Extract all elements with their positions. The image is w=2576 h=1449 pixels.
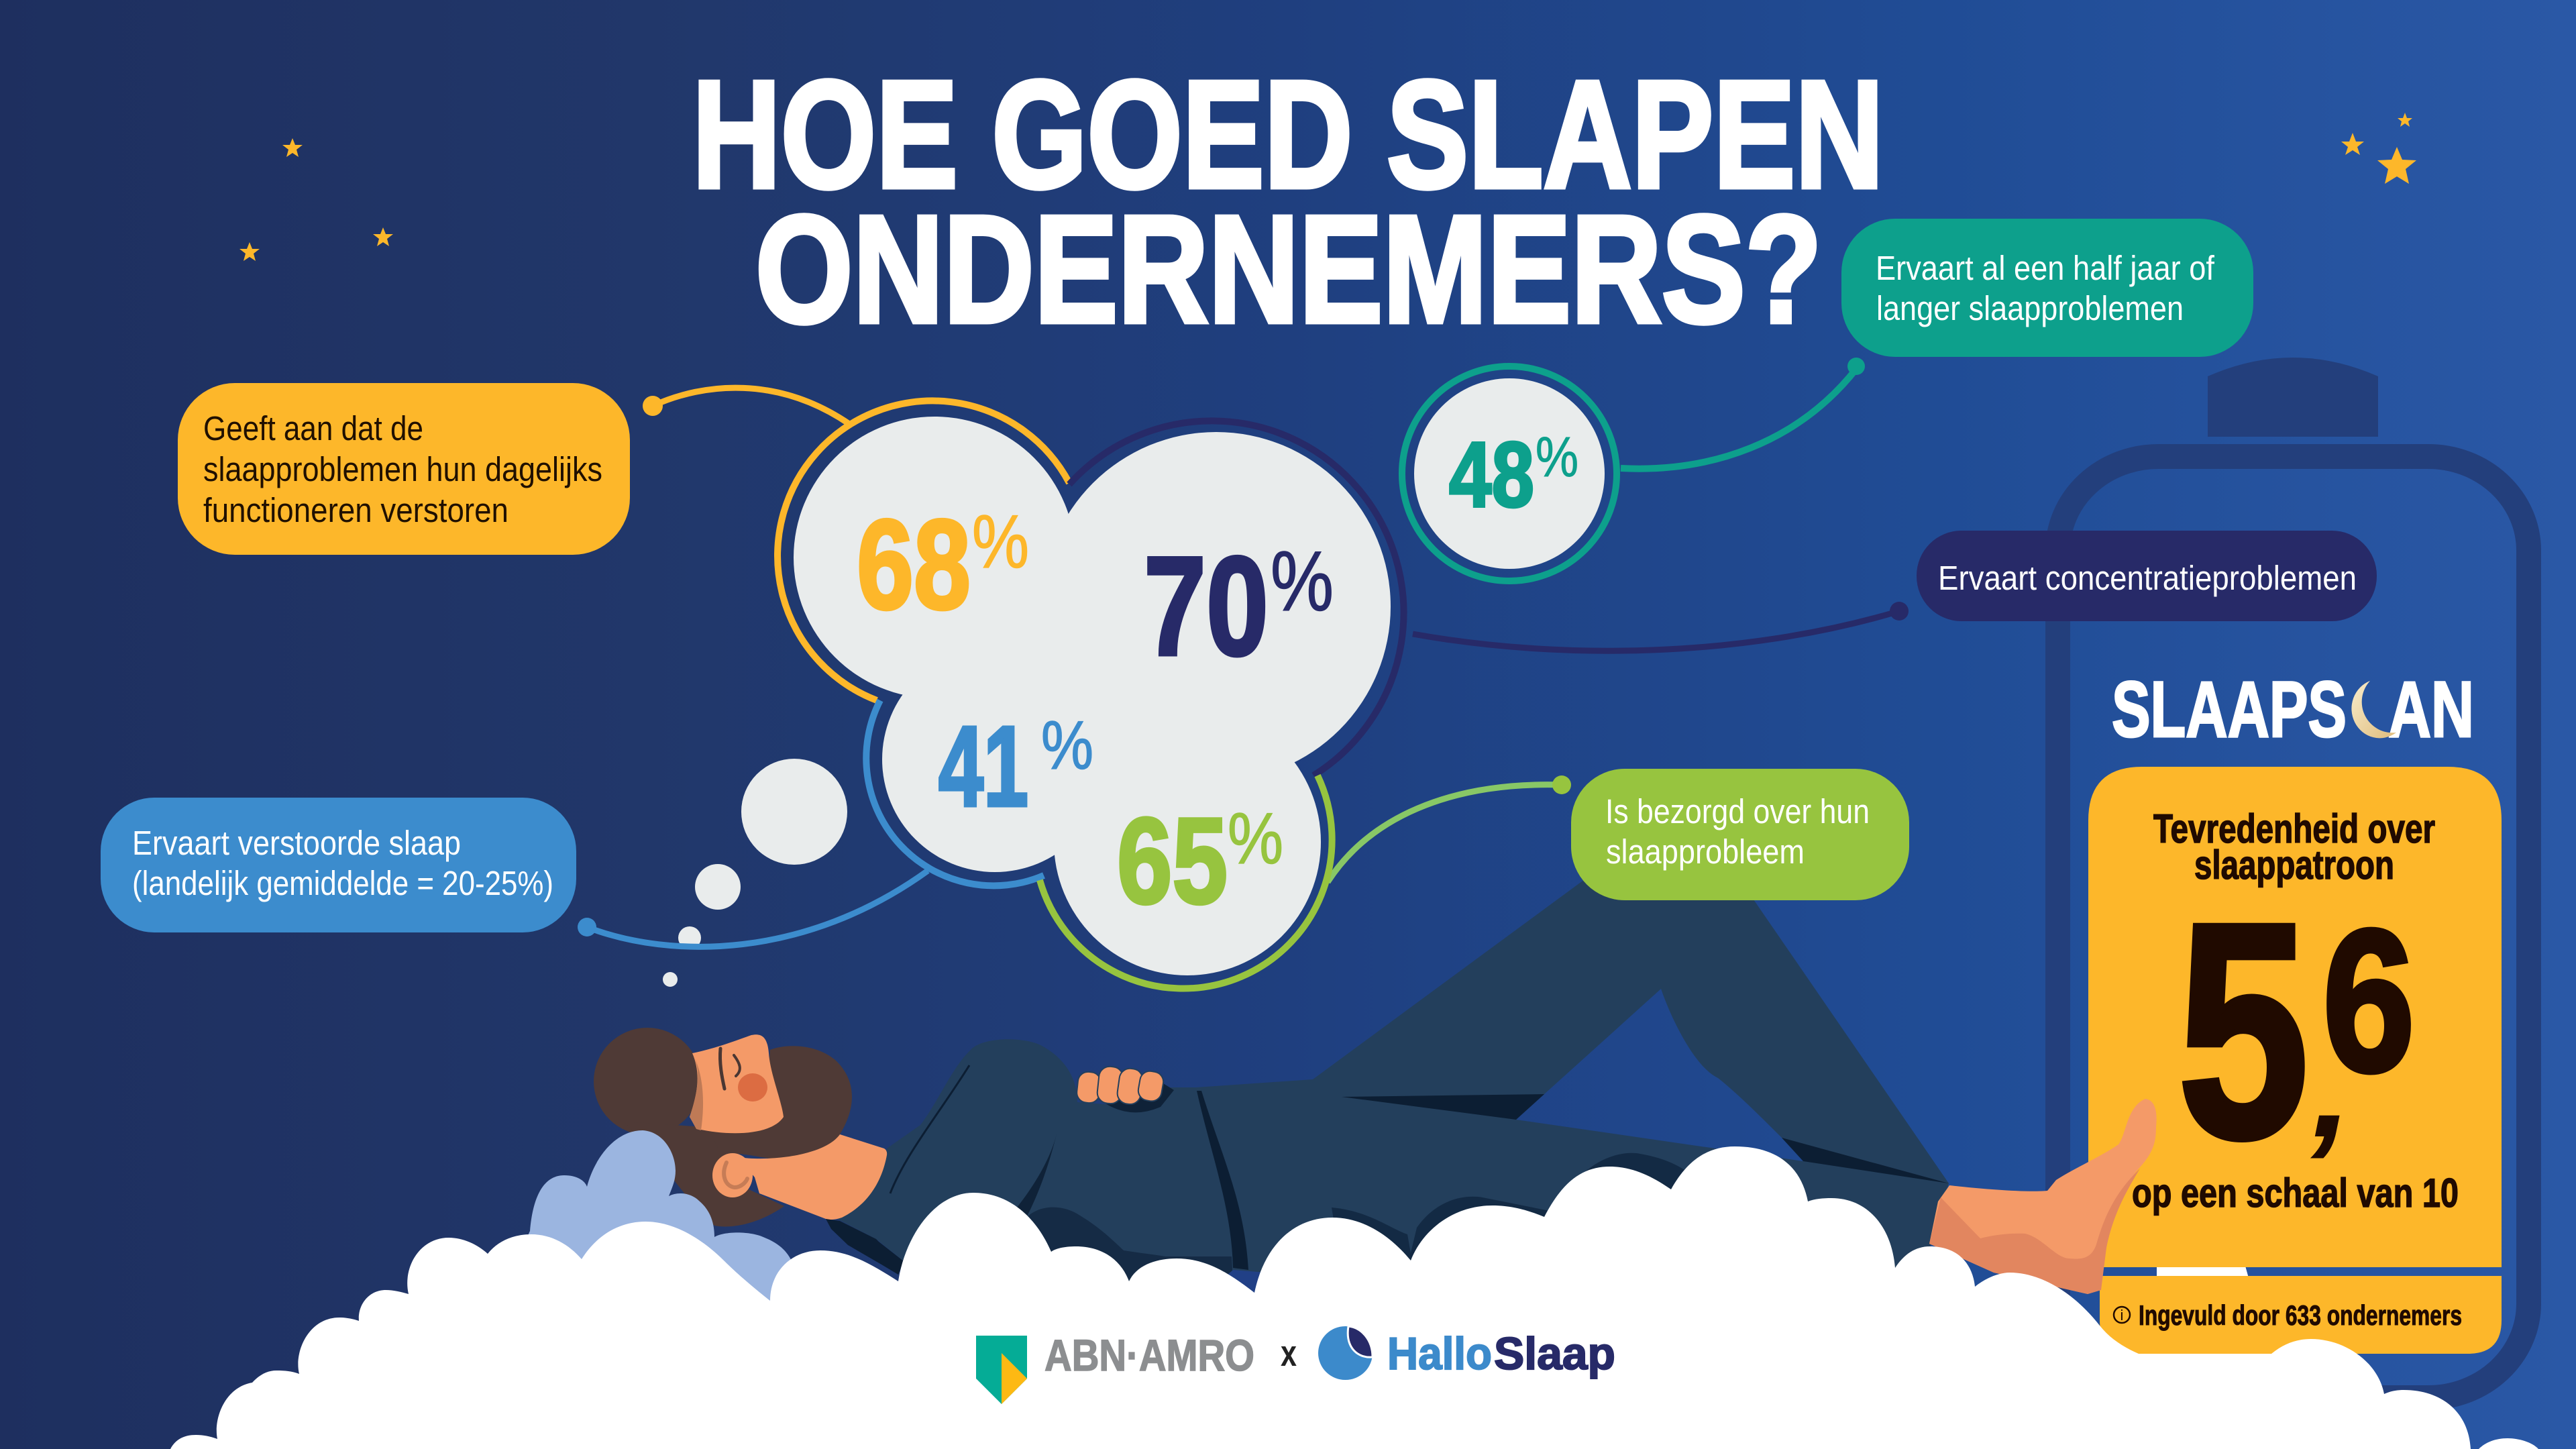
logo: HalloSlaap: Hallo	[1387, 1328, 1492, 1379]
stat: 48 percent: 48	[1449, 423, 1534, 527]
connector: blue	[578, 871, 928, 947]
stars right	[2341, 113, 2416, 184]
respondents box	[2100, 1276, 2502, 1354]
back of head	[594, 1028, 701, 1135]
thought dots	[663, 759, 847, 987]
thought cloud bubble	[794, 417, 1391, 975]
callout: blue	[101, 798, 576, 932]
cloud behind score card	[2157, 1261, 2249, 1278]
callout: green: slaapprobleem	[1606, 833, 1805, 871]
callout: teal: Ervaart al een half jaar of	[1876, 249, 2215, 287]
score card: op een schaal van 10	[2132, 1171, 2459, 1216]
stat: 68 percent: %	[972, 500, 1029, 584]
score card: slaappatroon	[2194, 843, 2394, 888]
face shadow	[690, 1059, 703, 1130]
logo: ABN AMRO	[976, 1330, 1254, 1404]
pillow	[510, 1130, 794, 1308]
connector: teal	[1621, 358, 1865, 469]
stars left	[239, 138, 393, 261]
callout: teal: langer slaapproblemen	[1876, 289, 2184, 327]
logo: ABN AMRO: ABN·AMRO	[1044, 1330, 1254, 1380]
callout: blue: (landelijk gemiddelde = 20-25%)	[132, 864, 553, 902]
callout: navy	[1917, 531, 2377, 621]
respondents box: i	[2121, 1307, 2123, 1324]
callout: orange: slaapproblemen hun dagelijks	[203, 450, 602, 488]
logo: HalloSlaap: Slaap	[1494, 1328, 1615, 1379]
connector: navy	[1413, 602, 1909, 651]
title: HOE GOED SLAPEN	[692, 50, 1884, 220]
callout: orange: functioneren verstoren	[203, 491, 508, 529]
body and legs	[837, 865, 1949, 1308]
callout: orange	[178, 383, 630, 555]
separator x: x	[1281, 1332, 1297, 1374]
foreground clouds	[170, 1146, 2538, 1449]
callout: teal	[1841, 219, 2253, 357]
stat: 41 percent: %	[1041, 707, 1093, 784]
title: ONDERNEMERS?	[755, 184, 1822, 355]
score card: 5	[2178, 859, 2309, 1201]
clothing folds	[826, 1065, 1949, 1308]
connector: green	[1328, 775, 1571, 882]
face	[690, 1034, 784, 1133]
callout: blue: Ervaart verstoorde slaap	[132, 824, 461, 862]
foot	[1929, 1099, 2157, 1294]
bottle outline	[2058, 358, 2529, 1398]
score card: ,	[2310, 1009, 2352, 1167]
stat: 70 percent: %	[1271, 534, 1334, 629]
cloud bubble outline arcs	[777, 400, 1403, 989]
stat: 70 percent: 70	[1144, 527, 1269, 685]
stat: 68 percent: 68	[857, 494, 971, 636]
stat: 48 percent: %	[1536, 425, 1578, 488]
callout: navy: Ervaart concentratieproblemen	[1938, 559, 2357, 597]
eyebrow	[720, 1049, 724, 1089]
inner ear	[724, 1163, 747, 1187]
ear	[712, 1153, 753, 1197]
SLAAPSCAN logo: AN	[2388, 665, 2474, 754]
callout: green	[1571, 769, 1909, 900]
lower hair	[624, 1122, 784, 1226]
score card: Tevredenheid over	[2153, 806, 2435, 851]
foot shadow	[1929, 1169, 2140, 1294]
score card	[2088, 767, 2502, 1267]
beard	[698, 1046, 852, 1159]
stat: 41 percent: 41	[938, 703, 1028, 830]
sleeping man illustration	[594, 865, 2157, 1308]
connector: orange	[643, 388, 849, 424]
stat: 48 percent	[1402, 366, 1617, 581]
stat: 65 percent: %	[1228, 798, 1283, 879]
callout: orange: Geeft aan dat de	[203, 409, 423, 447]
cheek	[738, 1073, 767, 1102]
logo: HalloSlaap	[1318, 1326, 1615, 1380]
SLAAPSCAN logo: SLAAPS	[2112, 665, 2347, 754]
score card: 6	[2322, 888, 2415, 1114]
stat: 65 percent: 65	[1117, 792, 1228, 929]
hand	[1076, 1065, 1174, 1112]
callout: green: Is bezorgd over hun	[1605, 792, 1870, 830]
respondents box: Ingevuld door 633 ondernemers	[2139, 1299, 2462, 1331]
title	[692, 50, 1884, 355]
neck	[738, 1134, 887, 1220]
closed eye	[734, 1055, 740, 1076]
